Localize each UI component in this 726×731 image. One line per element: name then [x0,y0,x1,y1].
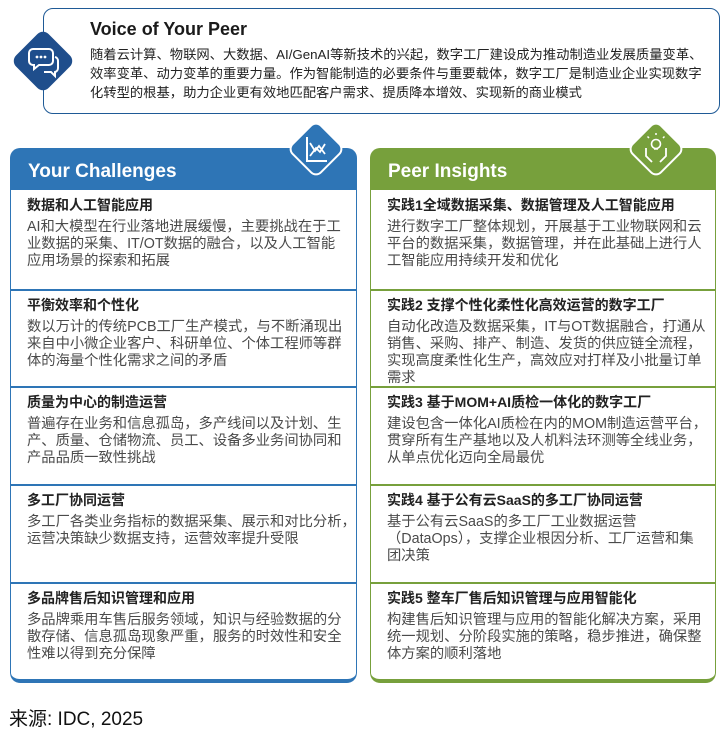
insight 3: 实践3 基于MOM+AI质检一体化的数字工厂 [387,394,651,410]
challenge 4: 多工厂协同运营 [27,492,125,508]
insight 1: 平台的数据采集，数据管理，并在此基础上进行人 [387,236,702,252]
challenge 3: 产、质量、仓储物流、员工、设备多业务间协同和 [27,433,342,449]
insight 2 [387,297,706,386]
challenge 5: 性难以得到充分保障 [27,646,156,662]
challenge 2: 平衡效率和个性化 [27,297,139,313]
challenge 2: 体的海量个性化需求之间的矛盾 [27,353,227,369]
insight 3: 建设包含一体化AI质检在内的MOM制造运营平台， [387,416,707,432]
insight 5: 体方案的顺利落地 [387,646,501,662]
challenge 2: 数以万计的传统PCB工厂生产模式，与不断涌现出 [27,319,342,335]
challenge 2 [27,297,342,369]
insight 4: 实践4 基于公有云SaaS的多工厂协同运营 [387,492,643,508]
icon: lightbulb hands diamond [630,124,682,176]
intro text: 效率变革、动力变革的重要力量。作为智能制造的必要条件与重要载体，数字工厂是制造业企业实现数字 [90,66,702,81]
insight 4: （DataOps），支撑企业根因分析、工厂运营和集 [387,531,694,547]
challenge 5 [27,590,342,662]
challenge 4: 运营决策缺少数据支持，运营效率提升受限 [27,531,299,547]
intro text: 随着云计算、物联网、大数据、AI/GenAI等新技术的兴起，数字工厂建设成为推动制造业发展质量变革、 [90,47,702,62]
heading: Voice of Your Peer [90,19,247,39]
insight 4: 团决策 [387,548,430,564]
panel header [10,148,357,190]
challenge 5: 散存储、信息孤岛现象严重，服务的时效性和安全 [27,629,342,645]
icon: chart diamond [290,124,342,176]
insight 1: 工智能应用持续开发和优化 [387,253,559,269]
panel header: Your Challenges [28,161,177,182]
challenge 4: 多工厂各类业务指标的数据采集、展示和对比分析， [27,514,356,530]
challenge 5: 多品牌乘用车售后服务领域，知识与经验数据的分 [27,612,342,628]
panel header: Peer Insights [388,161,507,182]
challenge 3: 产品品质一致性挑战 [27,450,156,466]
insight 5: 实践5 整车厂售后知识管理与应用智能化 [387,590,637,606]
intro text: 化转型的根基，助力企业更有效地匹配客户需求、提质降本增效、实现新的商业模式 [90,85,582,100]
insight 2: 自动化改造及数据采集，IT与OT数据融合，打通从 [387,319,706,335]
insight 3: 贯穿所有生产基地以及人机料法环测等全线业务， [387,433,702,449]
challenge 1: 业数据的采集、IT/OT数据的融合，以及人工智能 [27,236,335,252]
challenge 1: AI和大模型在行业落地进展缓慢，主要挑战在于工 [27,219,341,235]
insight 5: 统一规划、分阶段实施的策略，稳步推进，确保整 [387,629,702,645]
source note: 来源: IDC, 2025 [9,709,143,730]
insight 1: 实践1全域数据采集、数据管理及人工智能应用 [387,197,675,213]
challenge 4 [27,492,356,547]
intro text [90,47,702,100]
insight 5: 构建售后知识管理与应用的智能化解决方案，采用 [387,612,702,628]
insight 1 [387,197,702,269]
challenge 5: 多品牌售后知识管理和应用 [27,590,195,606]
insight 4 [387,492,694,564]
header box: voice of your peer [43,8,720,114]
panel: peer insights [370,148,716,683]
insight 4: 基于公有云SaaS的多工厂工业数据运营 [387,514,636,530]
insight 2: 实践2 支撑个性化柔性化高效运营的数字工厂 [387,297,665,313]
challenge 2: 来自中小微企业客户、科研单位、个体工程师等群 [27,336,342,352]
insight 5 [387,590,702,662]
challenge 3: 质量为中心的制造运营 [27,394,167,410]
challenge 1: 应用场景的探索和拓展 [27,253,170,269]
insight 2: 销售、采购、排产、制造、发货的供应链全流程， [387,336,702,352]
panel: your challenges [10,148,357,683]
challenge 1 [27,197,341,269]
insight 3: 从单点优化迈向全局最优 [387,450,544,466]
insight 1: 进行数字工厂整体规划，开展基于工业物联网和云 [387,219,702,235]
insight 3 [387,394,707,466]
insight 2: 需求 [387,370,416,386]
challenge 3 [27,394,342,466]
insight 2: 实现高度柔性化生产，高效应对打样及小批量订单 [387,353,702,369]
panel header [370,148,716,190]
challenge 1: 数据和人工智能应用 [27,197,153,213]
challenge 3: 普遍存在业务和信息孤岛，多产线间以及计划、生 [27,416,342,432]
icon: chat diamond [14,32,72,90]
